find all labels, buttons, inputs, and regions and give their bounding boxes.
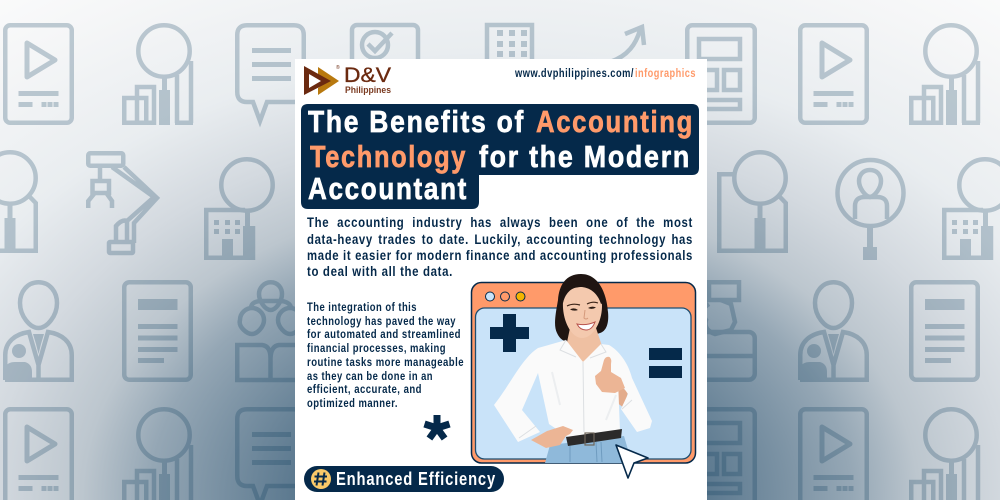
intro paragraph: The accounting industry has always been one of the most: [307, 214, 693, 230]
illustration: browser window with person: [472, 274, 696, 478]
section heading pill: Enhanced Efficiency: [304, 466, 504, 492]
icon: hand stack row 3: [685, 282, 755, 380]
title banner: [301, 104, 699, 209]
logo: D&V Philippines: D&V: [344, 64, 391, 87]
title banner: The Benefits of: [308, 104, 525, 139]
secondary paragraph: for automated and streamlined: [307, 327, 461, 341]
secondary paragraph: efficient, accurate, and: [307, 382, 422, 396]
icon: building row 1: [487, 25, 532, 122]
icon: cursor arrow: [616, 445, 648, 478]
face: [563, 287, 602, 338]
icon: document row 3 right: [911, 282, 978, 380]
icon: chat bubble row 4: [237, 409, 304, 500]
hair back: [555, 274, 608, 342]
icon: magnifier chart row 1: [124, 25, 193, 125]
intro paragraph: made it easier for modern finance and accounting professionals: [307, 247, 693, 263]
icon: magnifier document row 2 right: [719, 152, 786, 253]
title banner: Accountant: [308, 171, 468, 206]
website URL: www.dvphilippines.com/: [514, 68, 634, 80]
logo: D&V Philippines: [304, 64, 391, 96]
neck: [566, 328, 602, 362]
icon: hashtag badge: [311, 469, 331, 489]
browser window frame: [472, 282, 696, 463]
icon: arrow row 1: [610, 27, 644, 62]
forearm right: [612, 380, 628, 408]
title banner: Accounting: [536, 104, 694, 139]
secondary paragraph: routine tasks more manageable: [307, 355, 464, 369]
title banner: for the Modern: [479, 139, 691, 174]
icon: person row 3 right: [800, 282, 867, 382]
icon: magnifier chart row 4 right: [911, 409, 980, 500]
icon: newspaper row 1: [687, 25, 755, 123]
title banner: Technology: [310, 139, 467, 174]
icon: video row 4 right: [800, 409, 867, 500]
icon: chat bubble row 1: [237, 25, 304, 121]
intro paragraph: to deal with all the data.: [307, 263, 453, 279]
hand on hip: [531, 426, 573, 448]
white shirt: [494, 340, 652, 442]
icon: magnifier building row 2 right: [944, 159, 1000, 260]
secondary paragraph: [307, 300, 464, 410]
section heading pill: Enhanced Efficiency: Enhanced Efficiency: [336, 469, 496, 489]
intro paragraph: data-heavy trades to date. Luckily, accounting technology has: [307, 231, 693, 247]
icon: group row 3: [237, 282, 304, 380]
icon: plus sign: [490, 314, 529, 352]
thumbs-up hand: [595, 357, 625, 393]
secondary paragraph: optimized manner.: [307, 396, 398, 410]
icon: document row 3: [124, 282, 191, 380]
icon: video row 4: [5, 409, 72, 500]
jeans: [545, 436, 632, 463]
person photo: [494, 274, 652, 463]
icon: video row 1 right: [800, 25, 867, 123]
panel: infographic page: [295, 59, 707, 500]
icon: magnifier document row 2 left: [0, 152, 36, 253]
secondary paragraph: technology has paved the way: [307, 314, 456, 328]
logo: D&V Philippines: ®: [336, 64, 340, 71]
icon: person row 3: [5, 282, 72, 382]
eyes and brows: [567, 302, 598, 319]
smile: [577, 322, 595, 330]
icon: checklist row 1: [352, 25, 418, 122]
icon: newspaper row 4: [687, 409, 755, 500]
secondary paragraph: The integration of this: [307, 300, 417, 314]
icon: asterisk: [424, 415, 450, 438]
icon: video row 1 left: [5, 25, 72, 123]
icon: magnifier chart row 1 right: [911, 25, 980, 125]
intro paragraph: [307, 214, 693, 279]
icon: magnifier building row 2: [206, 159, 273, 260]
icon: magnifier chart row 4: [124, 409, 193, 500]
icon: equals sign: [649, 348, 682, 378]
icon: robot arm row 2: [88, 153, 157, 253]
secondary paragraph: as they can be done in an: [307, 369, 433, 383]
secondary paragraph: financial processes, making: [307, 341, 446, 355]
belt: [566, 429, 622, 446]
icon: magnifier person row 2: [838, 160, 904, 260]
logo: D&V Philippines: Philippines: [345, 85, 391, 96]
website URL: infographics: [635, 68, 696, 80]
